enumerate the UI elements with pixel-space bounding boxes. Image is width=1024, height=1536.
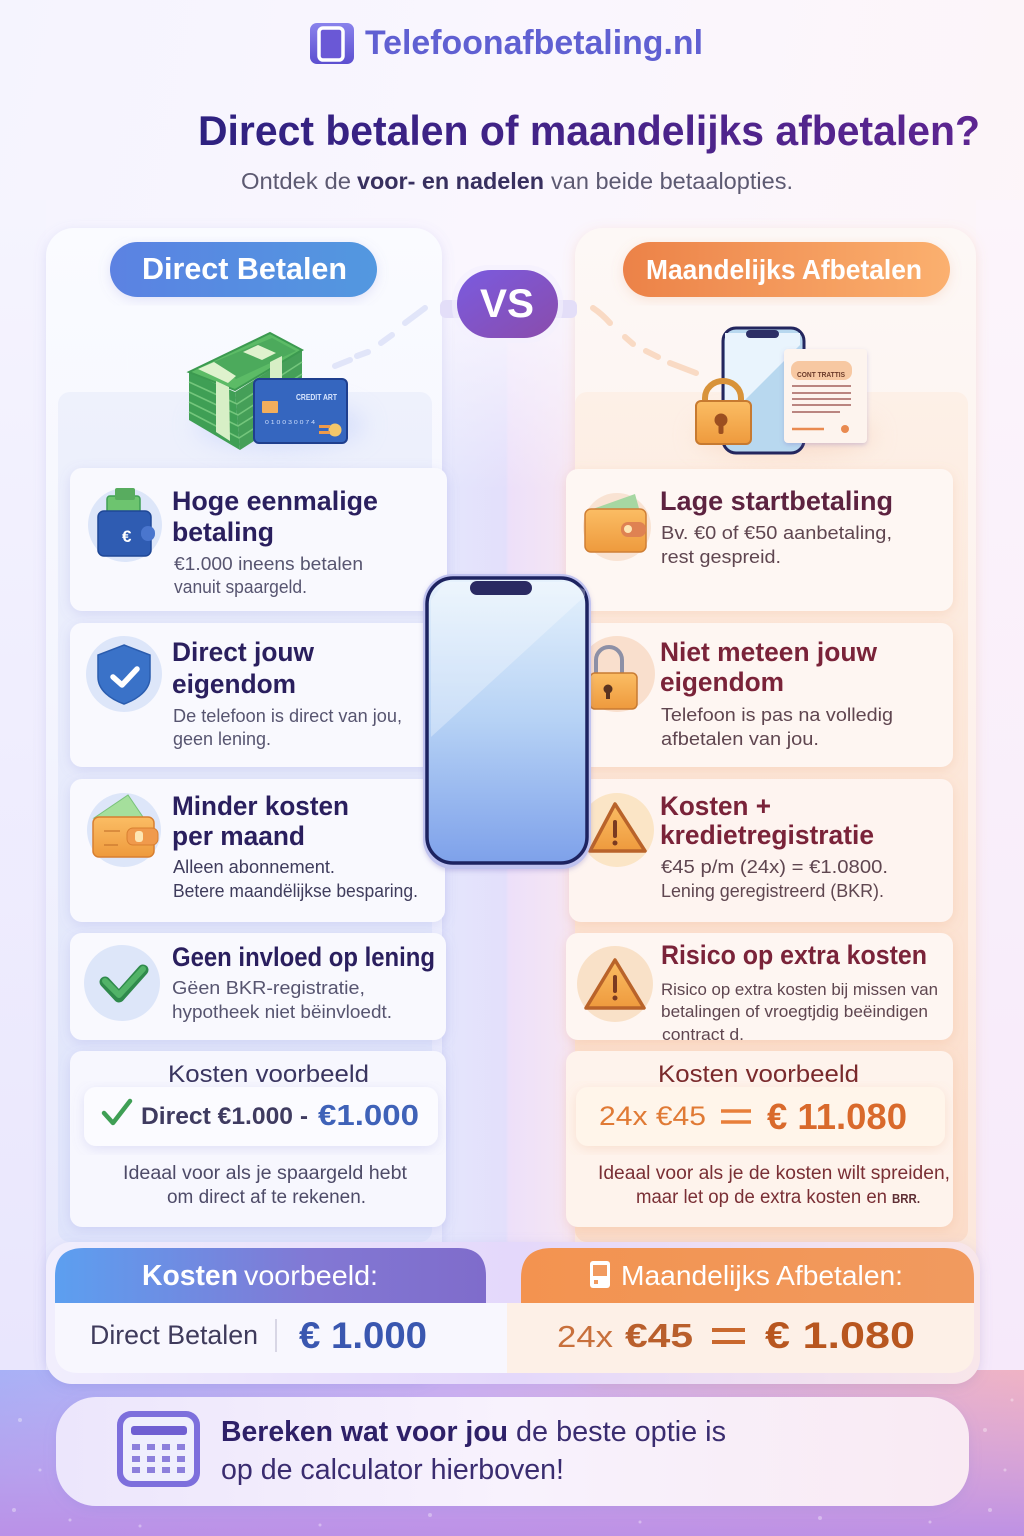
card: kosten + kredietregistratie: Lening geregistreerd (BKR). — [661, 881, 884, 901]
cost row: 24x €45 — [599, 1101, 706, 1131]
icon: shield with check — [86, 636, 162, 712]
subtitle: van beide betaalopties. — [551, 168, 793, 194]
connector: right dashes — [593, 308, 696, 373]
cost row: €1.000 — [318, 1100, 419, 1132]
cost row — [84, 1087, 438, 1146]
summary table — [46, 1242, 980, 1384]
pill: maandelijks afbetalen: Maandelijks Afbetalen — [646, 254, 922, 285]
pill: direct betalen: Direct Betalen — [142, 251, 347, 286]
card: risico op extra kosten — [566, 933, 953, 1044]
card: kosten + kredietregistratie: Kosten + — [660, 791, 771, 821]
value: direct: € 1.000 — [299, 1315, 427, 1356]
icon: phone logo — [310, 23, 354, 64]
card: minder kosten per maand: per maand — [172, 821, 305, 851]
cost row: - — [300, 1103, 308, 1130]
header: maandelijks — [521, 1248, 974, 1303]
cta text — [221, 1416, 726, 1486]
card: kosten voorbeeld direct: om direct af te rekenen. — [167, 1187, 366, 1208]
cta text: op de calculator hierboven! — [221, 1454, 564, 1486]
logo — [310, 23, 703, 64]
value: maandelijks: 24x — [557, 1319, 614, 1354]
card: lage startbetaling: Bv. €0 of €50 aanbetaling, — [661, 523, 892, 543]
header: maandelijks: Maandelijks Afbetalen: — [621, 1260, 903, 1291]
card: hoge eenmalige betaling: Hoge eenmalige — [172, 486, 378, 516]
cost row — [576, 1087, 945, 1146]
header: direct — [55, 1248, 486, 1303]
cta text: de beste optie is — [516, 1416, 726, 1448]
card: niet meteen jouw eigendom: Telefoon is pas na volledig — [661, 705, 893, 725]
icon: phone, lock and contract — [695, 328, 875, 457]
connector: left dashes — [335, 308, 425, 366]
phone illustration — [423, 574, 591, 869]
card: hoge eenmalige betaling — [70, 468, 447, 611]
title: Direct betalen of maandelijks afbetalen? — [198, 107, 980, 154]
card: kosten voorbeeld direct: Ideaal voor als je spaargeld hebt — [123, 1163, 408, 1184]
card: risico op extra kosten: contract d. — [662, 1025, 744, 1044]
header: direct: Kosten — [142, 1260, 238, 1292]
value: maandelijks: €45 — [625, 1317, 693, 1354]
card: niet meteen jouw eigendom: afbetalen van jou. — [661, 729, 819, 749]
subtitle: Ontdek de — [241, 168, 351, 194]
call to action — [56, 1397, 969, 1506]
icon: warning triangle — [580, 793, 654, 867]
card: niet meteen jouw eigendom — [566, 623, 953, 767]
icon: money stack and bank card — [189, 333, 365, 450]
card: kosten + kredietregistratie: €45 p/m (24x) = €1.0800. — [661, 857, 888, 877]
card: direct jouw eigendom: Direct jouw — [172, 637, 315, 667]
card: hoge eenmalige betaling: betaling — [172, 517, 274, 547]
card: kosten + kredietregistratie — [569, 779, 953, 922]
card: geen invloed op lening: hypotheek niet bëinvloedt. — [172, 1002, 392, 1022]
pill: maandelijks afbetalen — [623, 242, 950, 297]
card: kosten voorbeeld direct — [70, 1051, 446, 1227]
card: kosten voorbeeld maandelijks: maar let op de extra kosten en — [636, 1187, 887, 1208]
icon: green check — [84, 945, 160, 1021]
card: kosten voorbeeld maandelijks — [566, 1051, 953, 1227]
cost row: Direct €1.000 — [141, 1103, 293, 1130]
card: kosten voorbeeld direct: Kosten voorbeeld — [168, 1061, 369, 1088]
card: hoge eenmalige betaling: vanuit spaargeld. — [174, 577, 307, 597]
icon: blue wallet with cash: € — [122, 527, 132, 546]
value: direct: Direct Betalen — [90, 1320, 258, 1350]
card: minder kosten per maand: Minder kosten — [172, 791, 349, 821]
card: minder kosten per maand: Betere maandëlijkse besparing. — [173, 881, 418, 901]
card: direct jouw eigendom: eigendom — [172, 669, 296, 699]
panel: maandelijks afbetalen — [575, 228, 976, 1380]
logo text: Telefoonafbetaling.nl — [365, 24, 703, 62]
icon: calculator — [117, 1411, 200, 1487]
icon: orange wallet — [583, 493, 651, 561]
panel: direct betalen — [46, 228, 442, 1380]
card: direct jouw eigendom — [70, 623, 447, 767]
icon: money stack and bank card: 0 1 0 0 3 0 0 7 4 — [265, 420, 315, 426]
card: geen invloed op lening: Gëen BKR-registratie, — [172, 978, 365, 998]
card: kosten voorbeeld maandelijks: BRR. — [892, 1191, 920, 1206]
card: lage startbetaling: Lage startbetaling — [660, 486, 893, 516]
cta text: Bereken wat voor jou — [221, 1416, 508, 1448]
card: direct jouw eigendom: geen lening. — [173, 729, 271, 749]
card: kosten voorbeeld maandelijks: Kosten voorbeeld — [658, 1061, 859, 1088]
value: direct — [90, 1315, 427, 1356]
icon: orange wallet — [87, 793, 161, 867]
icon: blue wallet with cash — [88, 488, 162, 562]
card: lage startbetaling: rest gespreid. — [661, 547, 781, 567]
card: kosten voorbeeld maandelijks: Ideaal voor als je de kosten wilt spreiden, — [598, 1163, 950, 1184]
pill: direct betalen — [110, 242, 377, 297]
value: maandelijks — [557, 1315, 915, 1356]
card: risico op extra kosten: betalingen of vroegtjdig beëindigen — [661, 1002, 928, 1021]
card: minder kosten per maand — [70, 779, 445, 922]
subtitle: voor- en nadelen — [357, 168, 544, 194]
card: lage startbetaling — [566, 469, 953, 611]
icon: phone, lock and contract: CONT TRATTIS — [797, 372, 845, 379]
icon: warning triangle — [577, 946, 653, 1022]
icon: padlock — [579, 636, 655, 712]
icon: money stack and bank card: CREDIT ART — [296, 393, 337, 402]
card: geen invloed op lening — [70, 933, 446, 1040]
subtitle — [241, 168, 793, 194]
card: risico op extra kosten: Risico op extra kosten bij missen van — [661, 980, 938, 999]
card: niet meteen jouw eigendom: Niet meteen jouw — [660, 637, 878, 667]
card: geen invloed op lening: Geen invloed op lening — [172, 942, 435, 972]
value: maandelijks: € 1.080 — [765, 1315, 915, 1356]
icon: small phone — [590, 1261, 610, 1288]
vs badge — [440, 265, 577, 343]
card: niet meteen jouw eigendom: eigendom — [660, 667, 784, 697]
card: hoge eenmalige betaling: €1.000 ineens betalen — [174, 554, 363, 574]
card: direct jouw eigendom: De telefoon is direct van jou, — [173, 706, 402, 726]
card: minder kosten per maand: Alleen abonnement. — [173, 857, 335, 877]
header: direct: voorbeeld: — [244, 1260, 378, 1291]
card: kosten + kredietregistratie: kredietregistratie — [660, 820, 874, 850]
card: risico op extra kosten: Risico op extra kosten — [661, 940, 927, 970]
vs badge: VS — [480, 282, 534, 326]
cost row: € 11.080 — [767, 1096, 907, 1137]
